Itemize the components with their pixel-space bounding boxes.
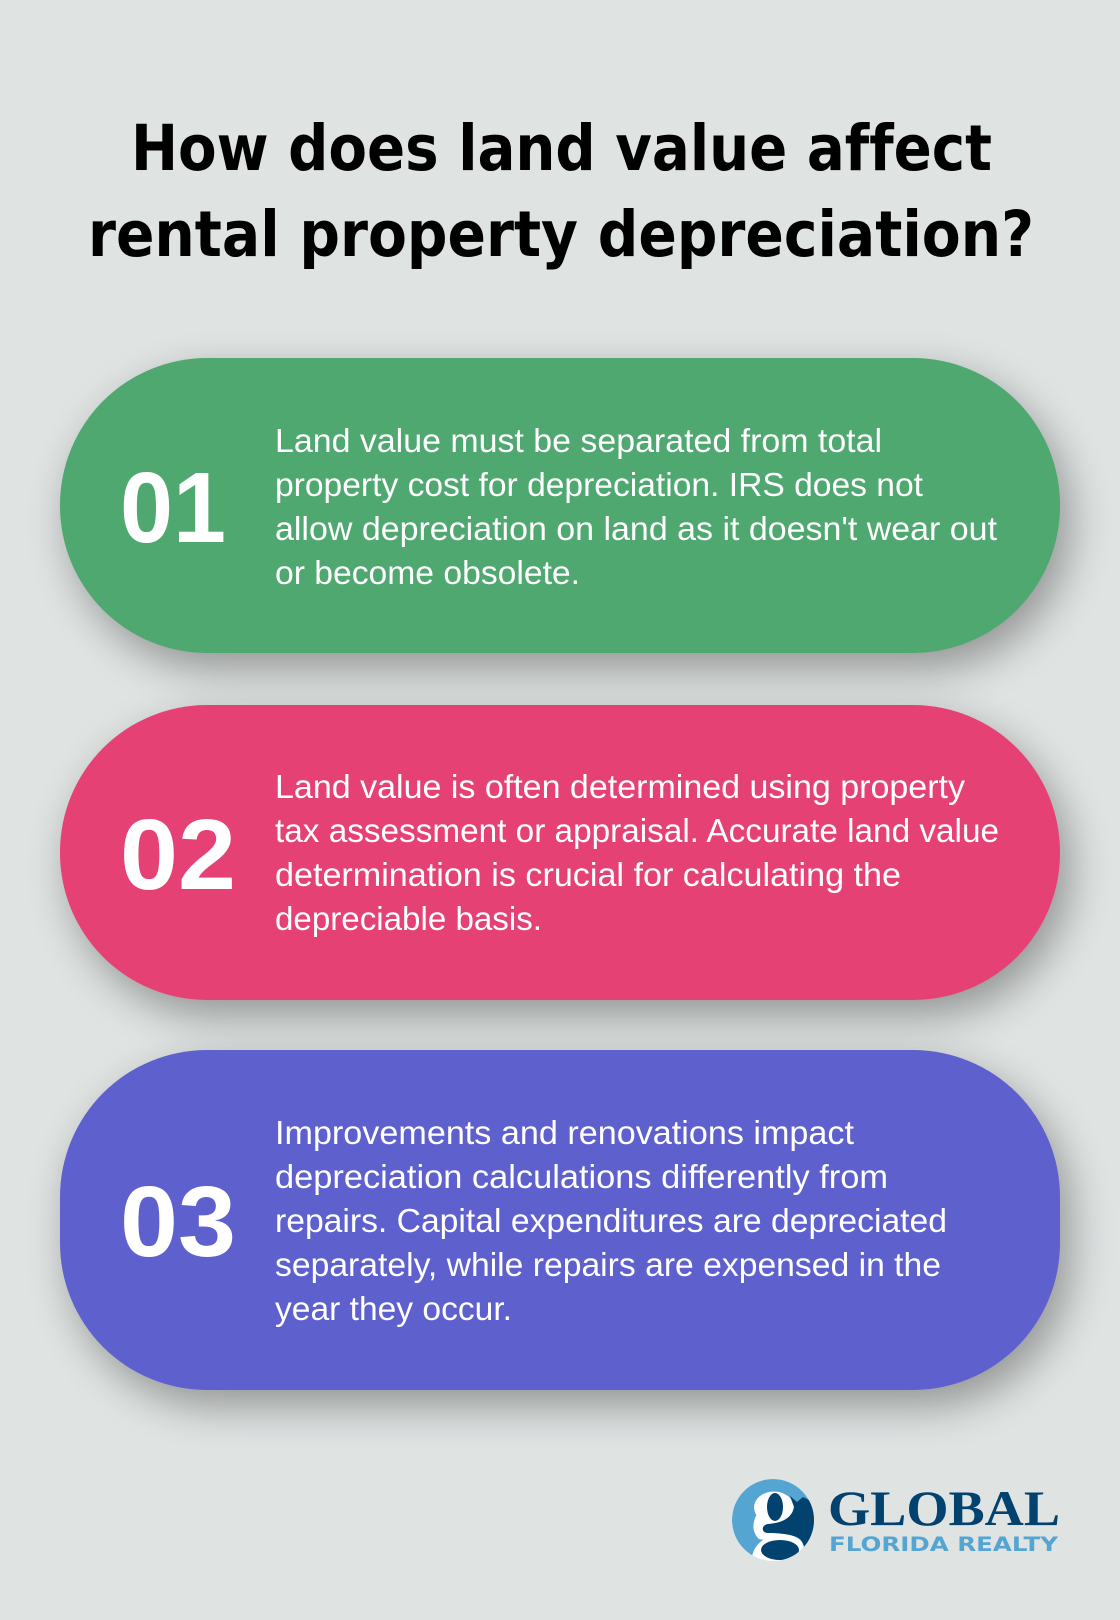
text: step 01 description: allow depreciation on land as it doesn't wear out <box>275 511 998 548</box>
text: step 02 description: determination is crucial for calculating the <box>275 857 901 894</box>
text: step 01 description: Land value must be separated from total <box>275 423 882 460</box>
title: rental property depreciation? <box>88 198 1034 271</box>
title: How does land value affect <box>131 112 992 185</box>
text: step 03 description <box>275 1115 947 1328</box>
panel: step 02 <box>60 705 1070 1016</box>
logo: Global Florida Realty <box>732 1479 1060 1565</box>
text: step 02 description: Land value is often determined using property <box>275 769 965 806</box>
number 02: 02 <box>120 799 236 911</box>
text: step 03 description: separately, while repairs are expensed in the <box>275 1247 941 1284</box>
text: step 01 description <box>275 423 998 592</box>
text: step 01 description: or become obsolete. <box>275 555 580 592</box>
text: step 03 description: year they occur. <box>275 1291 512 1328</box>
panel: step 01 <box>60 358 1070 669</box>
text: step 02 description: depreciable basis. <box>275 901 542 938</box>
panel background: pink pill <box>60 705 1060 1000</box>
text: step 02 description <box>275 769 999 938</box>
text: step 03 description: Improvements and renovations impact <box>275 1115 855 1152</box>
text: step 02 description: tax assessment or appraisal. Accurate land value <box>275 813 999 850</box>
title <box>88 112 1034 271</box>
icon: g emblem <box>732 1479 814 1561</box>
text: step 03 description: repairs. Capital expenditures are depreciated <box>275 1203 947 1240</box>
panel background: purple pill <box>60 1050 1060 1390</box>
number 03: 03 <box>120 1166 236 1278</box>
panel background: green pill <box>60 358 1060 653</box>
panel: step 03 <box>60 1050 1070 1406</box>
wordmark: FLORIDA REALTY: FLORIDA REALTY <box>829 1533 1059 1556</box>
wordmark: GLOBAL: GLOBAL <box>828 1480 1060 1536</box>
text: step 03 description: depreciation calculations differently from <box>275 1159 888 1196</box>
number 01: 01 <box>120 452 226 564</box>
text: step 01 description: property cost for depreciation. IRS does not <box>275 467 924 504</box>
